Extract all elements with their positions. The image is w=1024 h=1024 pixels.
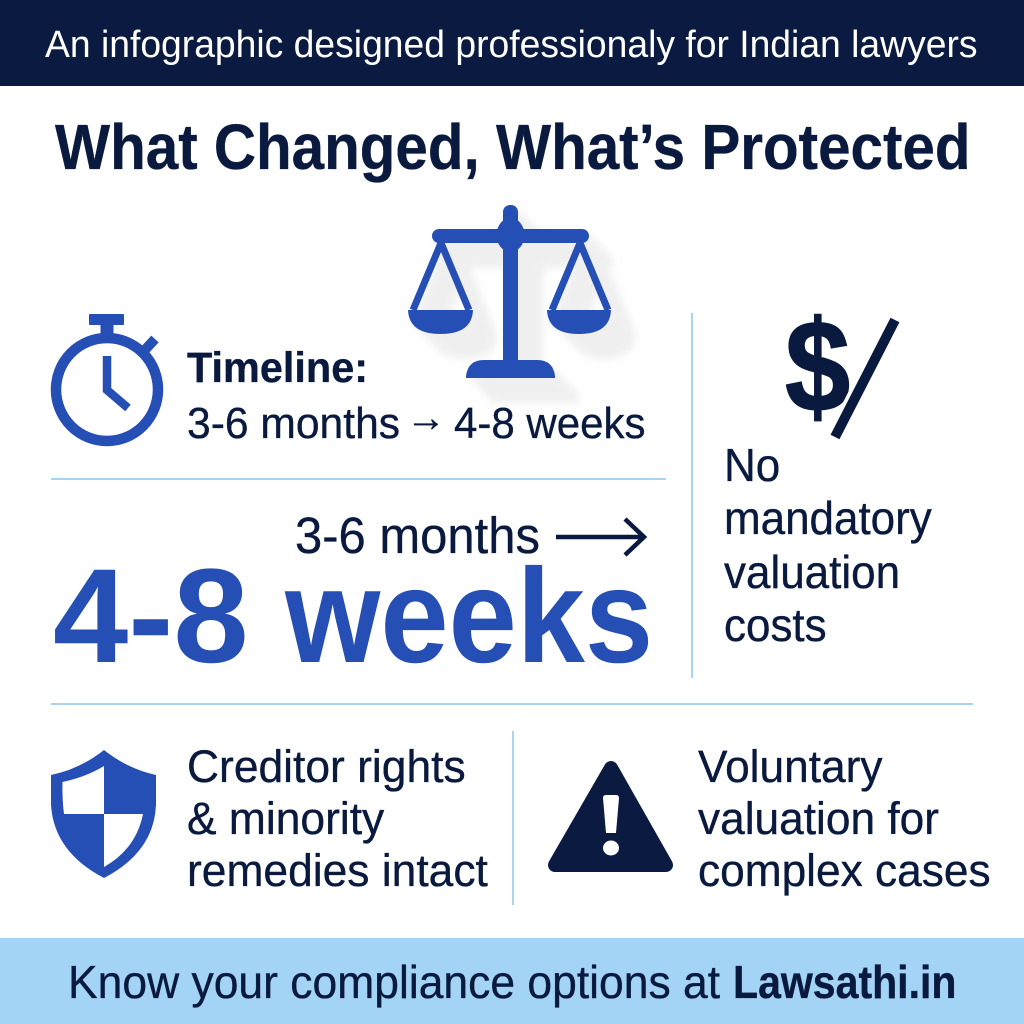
bottom banner [0, 938, 1024, 1024]
divider [51, 478, 666, 480]
voluntary text [698, 741, 991, 896]
arrow statement [295, 507, 648, 564]
vertical divider [691, 313, 693, 678]
big unit: weeks [285, 542, 653, 691]
timeline text [187, 344, 646, 448]
voluntary text: complex cases [698, 845, 991, 896]
vertical divider [512, 731, 514, 905]
previous duration: 3-6 months [295, 507, 540, 564]
icon: shield [51, 750, 156, 878]
voluntary text: valuation for [698, 793, 939, 844]
timeline arrow: → [406, 396, 446, 440]
creditor text: Creditor rights [187, 741, 466, 792]
no valuation text [724, 439, 932, 651]
no valuation text: costs [724, 599, 827, 651]
arrow [556, 517, 648, 557]
timeline label: Timeline: [187, 344, 368, 392]
no valuation text: mandatory [724, 492, 932, 544]
creditor text [187, 741, 488, 896]
icon: dollar slash [785, 293, 900, 440]
icon: scales of justice [408, 205, 635, 403]
icon: stopwatch [50, 314, 164, 446]
title: What Changed, What’s Protected [55, 111, 971, 183]
no valuation text: valuation [724, 546, 900, 598]
big digits: 4-8 [53, 542, 249, 691]
no valuation text: No [724, 439, 780, 491]
creditor text: & minority [187, 793, 384, 844]
creditor text: remedies intact [187, 845, 488, 896]
slash [830, 318, 900, 440]
icon: warning triangle [548, 761, 673, 872]
timeline from: 3-6 months [187, 399, 400, 448]
dollar sign: $ [785, 293, 850, 439]
voluntary text: Voluntary [698, 741, 882, 792]
divider [51, 703, 973, 705]
timeline to: 4-8 weeks [454, 399, 646, 448]
call to action: Know your compliance options at [68, 956, 720, 1008]
website: Lawsathi.in [733, 956, 956, 1008]
top banner [0, 0, 1024, 86]
big number [53, 542, 653, 691]
banner text: An infographic designed professionaly for Indian lawyers [45, 24, 978, 66]
